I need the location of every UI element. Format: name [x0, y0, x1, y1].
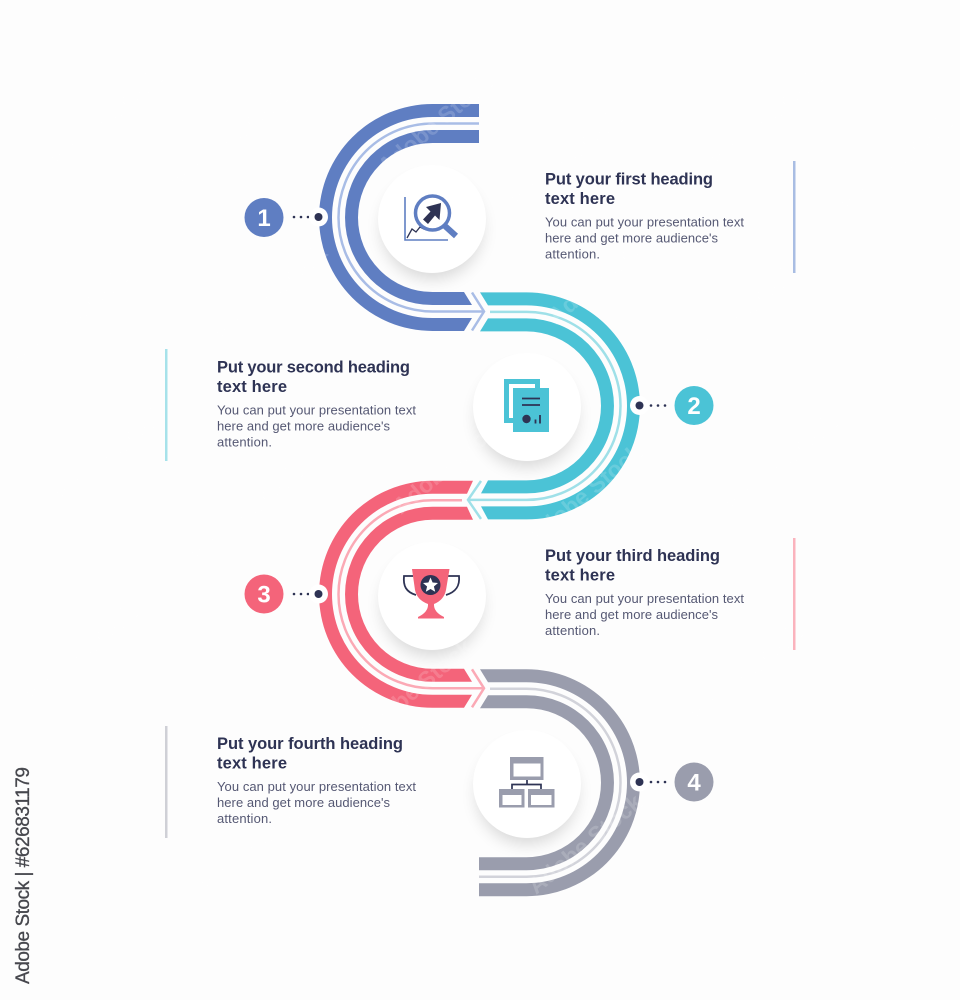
stock watermarks: Adobe Stock: [8, 264, 132, 374]
accent bar 4: [165, 726, 168, 838]
text block 1: Put your first heading: [545, 170, 713, 188]
stock watermarks: Adobe Stock: [388, 409, 512, 519]
text block 4: here and get more audience's: [217, 795, 390, 810]
stock watermarks: Adobe Stock: [503, 104, 627, 214]
icon backing circle: step 1: [378, 165, 486, 279]
icon: trophy: [404, 569, 459, 618]
marker 4: number and connector: 4: [687, 770, 701, 796]
stock watermarks: Adobe Stock: [353, 634, 477, 744]
text block 3: here and get more audience's: [545, 607, 718, 622]
marker 3: number and connector: 3: [257, 582, 271, 608]
stock watermarks: Adobe Stock: [703, 64, 827, 174]
text block 2: here and get more audience's: [217, 418, 390, 434]
icon backing circle: step 4: [473, 730, 581, 844]
stock watermarks: Adobe Stock: [393, 729, 517, 839]
marker 2: number and connector: [630, 386, 714, 425]
stock watermarks: Adobe Stock: [683, 619, 807, 729]
stock watermarks: Adobe Stock: [523, 439, 647, 549]
icon backing circle: step 2: [473, 353, 581, 467]
stock watermarks: Adobe Stock: [43, 64, 167, 174]
text block 1: [545, 170, 744, 262]
stock watermarks: Adobe Stock: [193, 789, 317, 899]
icon: hierarchy diagram: [499, 757, 554, 808]
stock watermarks: Adobe Stock: [718, 409, 842, 519]
stock watermarks: Adobe Stock: [18, 599, 142, 709]
text block 4: attention.: [217, 811, 272, 826]
text block 1: You can put your presentation text: [545, 214, 744, 230]
accent bar 2: [165, 349, 168, 461]
text block 2: text here: [217, 378, 287, 396]
text block 3: Put your third heading: [545, 547, 720, 565]
stock watermarks: Adobe Stock: [373, 69, 497, 179]
text block 4: [217, 735, 416, 826]
stock watermarks: Adobe Stock: [678, 259, 802, 369]
stock watermarks: Adobe Stock: [168, 84, 292, 194]
text block 3: text here: [545, 566, 615, 584]
stock watermarks: Adobe Stock: [183, 459, 307, 569]
text block 1: attention.: [545, 246, 600, 262]
text block 3: [545, 547, 744, 638]
step 1 blue curved band: [319, 104, 484, 331]
stock watermarks: Adobe Stock: [523, 789, 647, 899]
text block 1: here and get more audience's: [545, 230, 718, 246]
text block 2: [217, 358, 416, 450]
marker 2: number and connector: 2: [687, 393, 701, 420]
stock watermarks: Adobe Stock: [208, 239, 332, 349]
marker 4: number and connector: [630, 762, 714, 802]
step 2 teal curved band: [468, 292, 640, 519]
accent bar 1: [793, 161, 796, 273]
text block 4: text here: [217, 754, 287, 772]
text block 2: attention.: [217, 434, 272, 450]
icon: documents: [504, 379, 549, 432]
marker 1: number and connector: [244, 198, 328, 237]
marker 3: number and connector: [244, 574, 328, 614]
stock watermarks: Adobe Stock: [543, 219, 667, 329]
text block 4: Put your fourth heading: [217, 735, 403, 753]
stock watermarks: Adobe Stock: [833, 109, 957, 219]
text block 3: You can put your presentation text: [545, 591, 744, 606]
accent bar 3: [793, 538, 796, 650]
stock id side label: Adobe Stock | #626831179: [13, 767, 34, 984]
step 4 grey curved band: [479, 669, 640, 896]
icon: chart with magnifier: [405, 196, 456, 240]
text block 2: You can put your presentation text: [217, 402, 416, 418]
text block 3: attention.: [545, 623, 600, 638]
text block 4: You can put your presentation text: [217, 779, 416, 794]
marker 1: number and connector: 1: [257, 205, 271, 232]
step 3 red curved band: [319, 481, 484, 708]
text block 1: text here: [545, 190, 615, 208]
icon backing circle: step 3: [378, 542, 486, 656]
text block 2: Put your second heading: [217, 358, 410, 376]
stock watermarks: Adobe Stock: [48, 399, 172, 509]
